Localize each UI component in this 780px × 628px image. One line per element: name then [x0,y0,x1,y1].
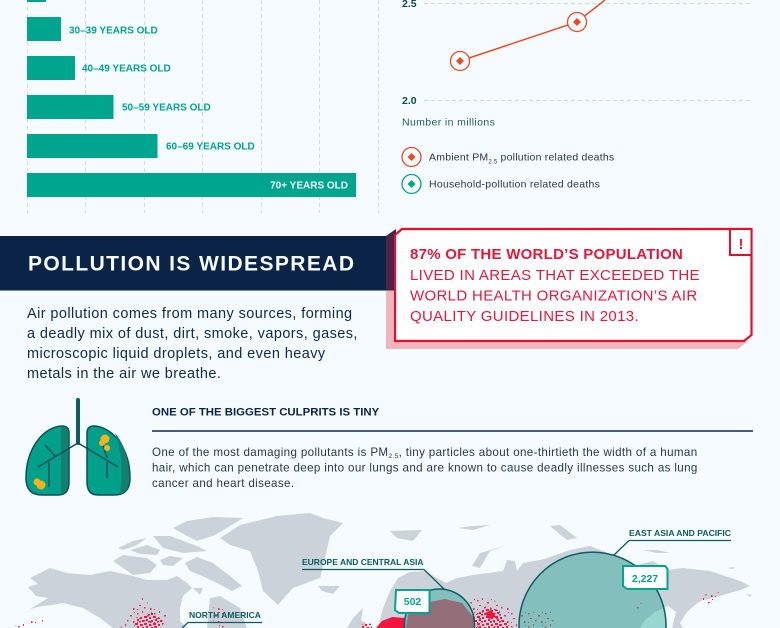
paragraph: PM2.5: cancer and heart disease. [152,477,294,490]
bar: 30-39: 30–39 YEARS OLD [69,26,158,36]
bar: 50-59 [27,95,211,119]
bar: 40-49 [27,56,171,80]
subheading: ONE OF THE BIGGEST CULPRITS IS TINY [152,406,380,418]
intro paragraph: Air pollution comes from many sources, forming [27,306,353,322]
value box [623,566,668,589]
leader line [614,540,731,555]
axis caption: Number in millions [402,116,495,128]
banner title: POLLUTION IS WIDESPREAD [28,252,355,276]
legend [402,148,614,194]
paragraph: PM2.5: 2.5 [388,453,399,460]
icon: lungs [26,400,130,495]
axis label 2.0: 2.0 [402,95,417,107]
bar: youngest age group [27,0,46,2]
label: North America [182,610,262,628]
region label: EAST ASIA AND PACIFIC [629,528,731,538]
pollution dots [7,592,722,628]
bar: 30-39 [27,17,158,41]
bar chart: deaths by age [27,0,356,197]
callout text: QUALITY GUIDELINES IN 2013. [410,308,639,325]
bar: 40-49: 40–49 YEARS OLD [82,64,171,74]
legend: ambient: Ambient PM [429,152,488,164]
label: North America: NORTH AMERICA [189,610,261,620]
marker: first point [450,52,470,70]
legend: ambient [402,148,614,166]
intro paragraph: metals in the air we breathe. [27,366,221,382]
paragraph: PM2.5: hair, which can penetrate deep into our lungs and are known to cause deadly illnesses such as lung [152,462,698,474]
callout: 87 percent [386,229,752,349]
intro paragraph: a deadly mix of dust, dirt, smoke, vapors, gases, [27,326,358,342]
legend: ambient: 2.5 [488,160,498,166]
region label: EUROPE AND CENTRAL ASIA [302,557,424,567]
intro paragraph: microscopic liquid droplets, and even heavy [27,346,326,362]
value box [395,590,430,613]
line chart: deaths in millions [402,0,753,128]
map land [28,513,752,628]
bar: 50-59: 50–59 YEARS OLD [122,102,211,114]
legend: household [402,174,600,194]
value box: 502 [404,596,421,608]
world map [7,513,752,628]
callout text: 87% OF THE WORLD’S POPULATION [410,246,683,263]
bar: 60-69 [27,134,255,158]
alert icon [730,229,752,255]
value box: 2,227 [632,573,658,585]
paragraph: PM2.5: One of the most damaging pollutants is PM [152,446,388,459]
section banner [0,236,396,290]
legend: household: Household-pollution related deaths [429,178,600,190]
line: ambient deaths [460,0,605,61]
bar: 70+: 70+ YEARS OLD [270,180,348,192]
bar: 70+ [27,173,356,197]
bubble: Europe and Central Asia [302,557,474,628]
marker: second point [568,12,586,32]
alert icon: ! [738,236,744,253]
bar: 60-69: 60–69 YEARS OLD [166,142,255,152]
bubble: East Asia and Pacific [519,528,731,628]
legend: ambient: pollution related deaths [497,152,614,164]
paragraph: PM2.5: , tiny particles about one-thirtieth the width of a human [399,446,698,459]
leader line [302,570,445,590]
callout text: LIVED IN AREAS THAT EXCEEDED THE [410,267,700,284]
callout text: WORLD HEALTH ORGANIZATION’S AIR [410,288,698,304]
